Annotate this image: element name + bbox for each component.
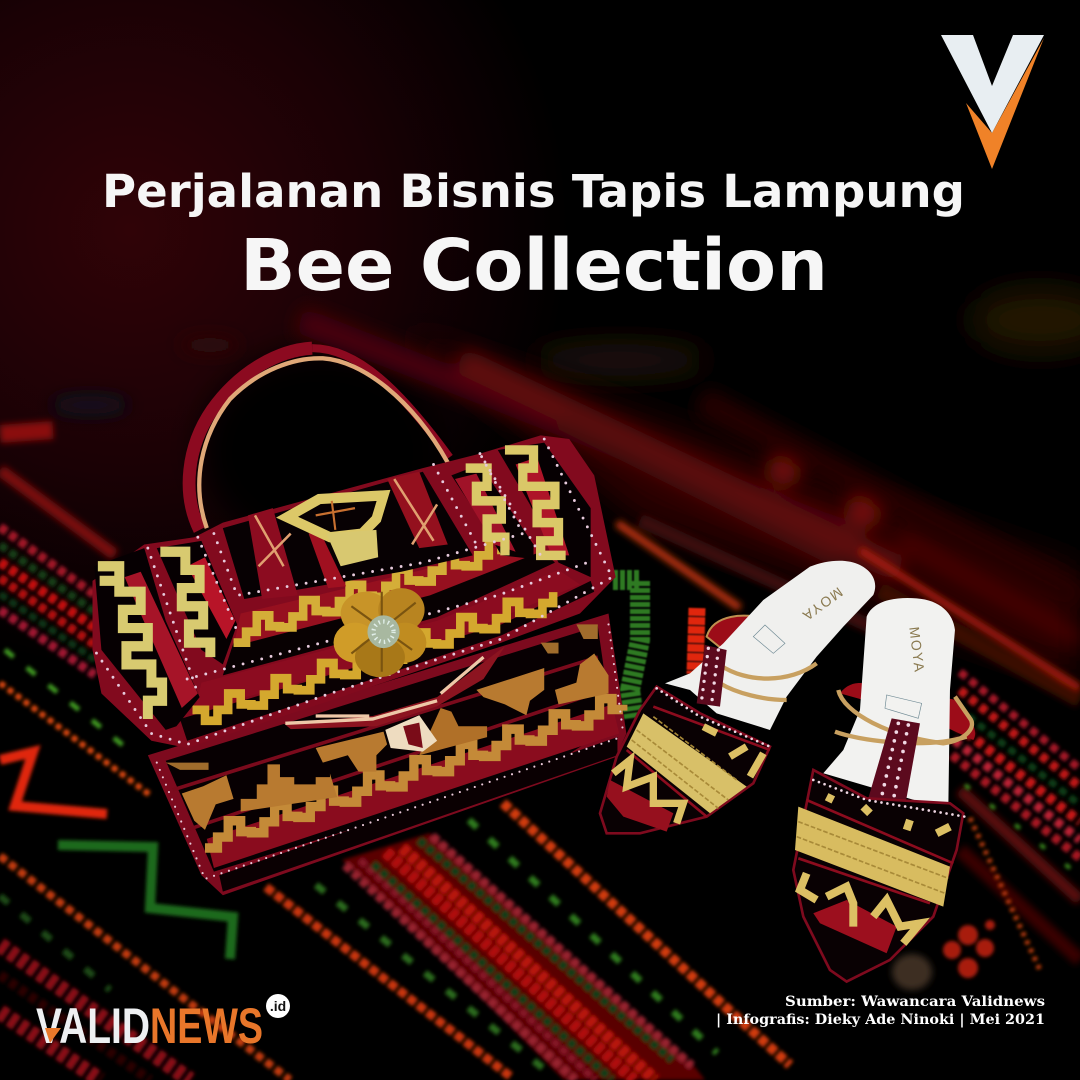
- right shoe beaded strap: [868, 718, 920, 807]
- background: beige flower blur: [892, 954, 932, 990]
- right shoe insole: [823, 598, 955, 810]
- logo: VALIDNEWS wordmark: [36, 994, 290, 1054]
- background: orange zigzag motif: [0, 752, 107, 814]
- title: [102, 165, 965, 307]
- right shoe gold ring straps: [835, 690, 972, 743]
- gold flower brooch: [334, 588, 426, 677]
- right shoe insole print: MOYA: [906, 626, 928, 674]
- left shoe insole print: [753, 584, 846, 653]
- top centre panel: [223, 472, 473, 599]
- right shoe gold panel: [795, 807, 950, 907]
- background: green stitched band: [613, 580, 640, 718]
- clasp bar: [284, 646, 505, 752]
- flap gold zigzags: [234, 539, 512, 643]
- right shoe red band and motif: [813, 900, 897, 953]
- centre gold motif: [287, 495, 384, 537]
- left shoe red band and motif: [607, 780, 673, 832]
- left shoe beaded strap: [697, 645, 727, 707]
- source credit: [716, 994, 1045, 1028]
- logo: VALIDNEWS wordmark: NEWS: [150, 998, 263, 1054]
- handle: [189, 348, 450, 530]
- logo: Validnews V mark: [941, 35, 1044, 169]
- left shoe gold panel: [627, 713, 747, 813]
- right shoe insole print: [885, 626, 928, 718]
- left shoe insole: [665, 561, 875, 730]
- flap lower black bands: [180, 581, 594, 741]
- logo: VALIDNEWS wordmark: VALID: [36, 998, 150, 1054]
- photo: tapis handbag: [92, 348, 626, 895]
- background: left stitched band: [0, 527, 290, 1080]
- left shoe strap back: [707, 616, 770, 650]
- background: orange edge lines: [266, 803, 1040, 1077]
- logo: VALIDNEWS wordmark: .id: [270, 998, 286, 1014]
- background: far blurred tapis stripes: [300, 320, 1080, 640]
- source credit: Sumber: Wawancara Validnews: [785, 994, 1045, 1010]
- left shoe gold ring straps: [720, 663, 817, 700]
- background: right stitched band: [952, 672, 1080, 876]
- background: green stitching dots: [0, 650, 717, 1073]
- source credit: | Infografis: Dieky Ade Ninoki | Mei 2021: [716, 1012, 1045, 1028]
- right shoe toe: [793, 770, 963, 982]
- background: red embroidered flower: [943, 920, 995, 978]
- title: Bee Collection: [240, 224, 828, 307]
- left side panels: [94, 548, 200, 730]
- title: Perjalanan Bisnis Tapis Lampung: [102, 165, 965, 218]
- left shoe insole print: MOYA: [799, 584, 846, 625]
- background: mid-blur stripes right: [0, 430, 1080, 960]
- rhinestones: [94, 439, 612, 744]
- left shoe toe: [600, 687, 770, 833]
- bag body: [148, 614, 626, 895]
- flap: [92, 435, 616, 748]
- background: green zigzag motif: [58, 845, 233, 959]
- photo: right shoe: [793, 598, 975, 982]
- background: centre red band: [342, 833, 705, 1080]
- photo: left shoe: [600, 561, 875, 833]
- background: red-orange bar: [695, 608, 697, 674]
- right side panels: [451, 464, 534, 559]
- right shoe strap back: [840, 683, 975, 740]
